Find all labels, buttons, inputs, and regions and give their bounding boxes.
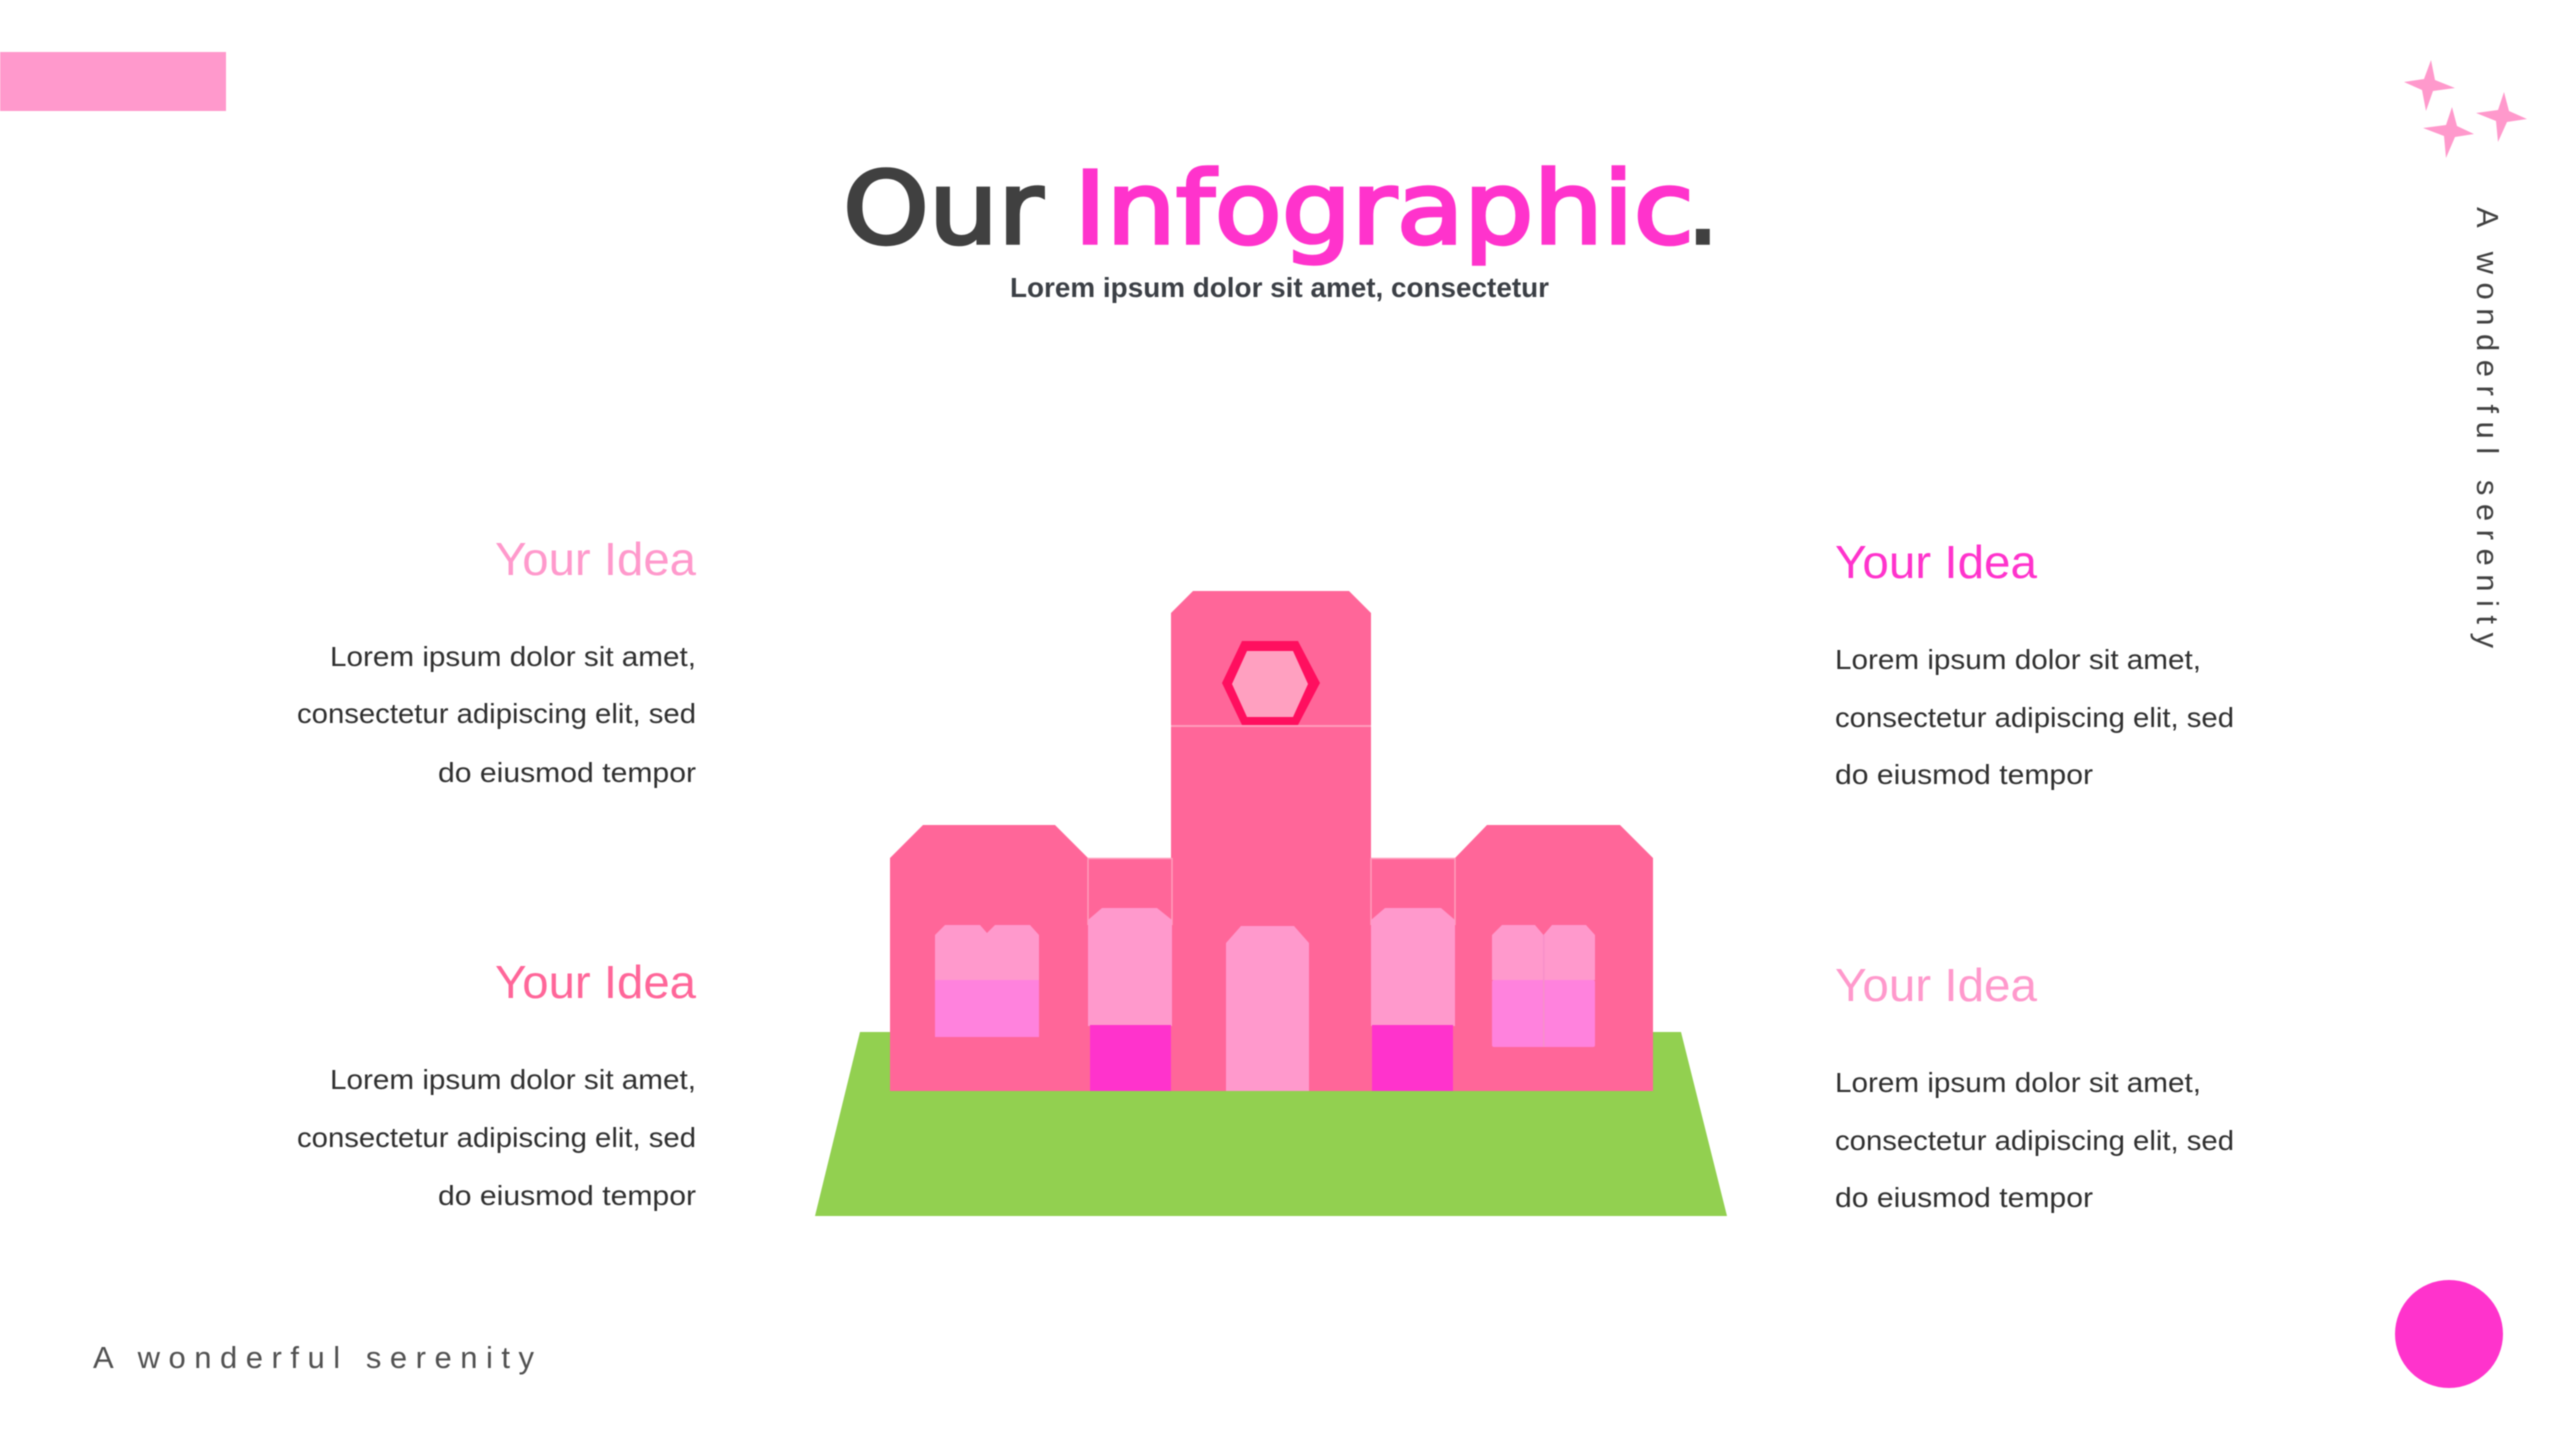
connector edge lines (1088, 858, 1455, 925)
text block: top right idea: Lorem ipsum dolor sit amet, (1835, 644, 2201, 675)
tower band line (1171, 725, 1371, 727)
text block: bottom left idea (297, 956, 696, 1211)
text block: bottom right idea: Your Idea (1835, 959, 2037, 1011)
text block: bottom right idea: Lorem ipsum dolor sit amet, (1835, 1067, 2201, 1098)
text block: top right idea: Your Idea (1835, 536, 2037, 588)
text block: bottom left idea: do eiusmod tempor (438, 1180, 696, 1211)
text block: bottom right idea (1835, 959, 2234, 1213)
left connector wall (1088, 858, 1172, 1091)
text block: bottom left idea: Your Idea (495, 956, 696, 1008)
decorative pink bar (0, 52, 226, 111)
text block: top left idea: Lorem ipsum dolor sit amet, (330, 641, 696, 672)
right connector base (1372, 1025, 1453, 1091)
left window bottom (935, 980, 1039, 1037)
right connector wall (1371, 858, 1455, 1091)
right wing (1455, 825, 1653, 1091)
illustration: building (815, 591, 1727, 1216)
icon: sparkle stars (2404, 60, 2527, 158)
left connector door (1088, 908, 1172, 1026)
central tower (1171, 591, 1371, 1091)
text block: top right idea (1835, 536, 2234, 790)
title (843, 150, 1719, 267)
subtitle: Lorem ipsum dolor sit amet, consectetur (1010, 272, 1549, 303)
vertical tagline: A wonderful serenity (2470, 207, 2505, 648)
left connector base (1090, 1025, 1171, 1091)
text block: bottom right idea: consectetur adipiscing elit, sed (1835, 1125, 2234, 1156)
title: Infographic (1074, 150, 1694, 267)
text block: bottom left idea: consectetur adipiscing elit, sed (297, 1122, 696, 1153)
right window divider (1543, 935, 1544, 1047)
footer tagline: A wonderful serenity (93, 1340, 534, 1375)
text block: top left idea (297, 533, 696, 788)
text block: top left idea: consectetur adipiscing elit, sed (297, 698, 696, 729)
left wing (890, 825, 1088, 1091)
text block: top right idea: consectetur adipiscing elit, sed (1835, 702, 2234, 733)
hexagon inner (1232, 651, 1308, 717)
ground (815, 1032, 1727, 1216)
text block: top left idea: do eiusmod tempor (438, 757, 696, 788)
center door (1226, 926, 1309, 1091)
right connector door (1371, 908, 1455, 1026)
text block: bottom right idea: do eiusmod tempor (1835, 1182, 2093, 1213)
decorative magenta circle (2395, 1280, 2503, 1388)
right window bottom (1492, 980, 1595, 1047)
title: . (1687, 150, 1719, 267)
right window top (1492, 925, 1595, 980)
text block: top right idea: do eiusmod tempor (1835, 759, 2093, 790)
text block: top left idea: Your Idea (495, 533, 696, 585)
left window top (935, 925, 1039, 980)
text block: bottom left idea: Lorem ipsum dolor sit amet, (330, 1064, 696, 1095)
title: Our (843, 150, 1044, 267)
icon: hexagon clock (1222, 641, 1320, 725)
